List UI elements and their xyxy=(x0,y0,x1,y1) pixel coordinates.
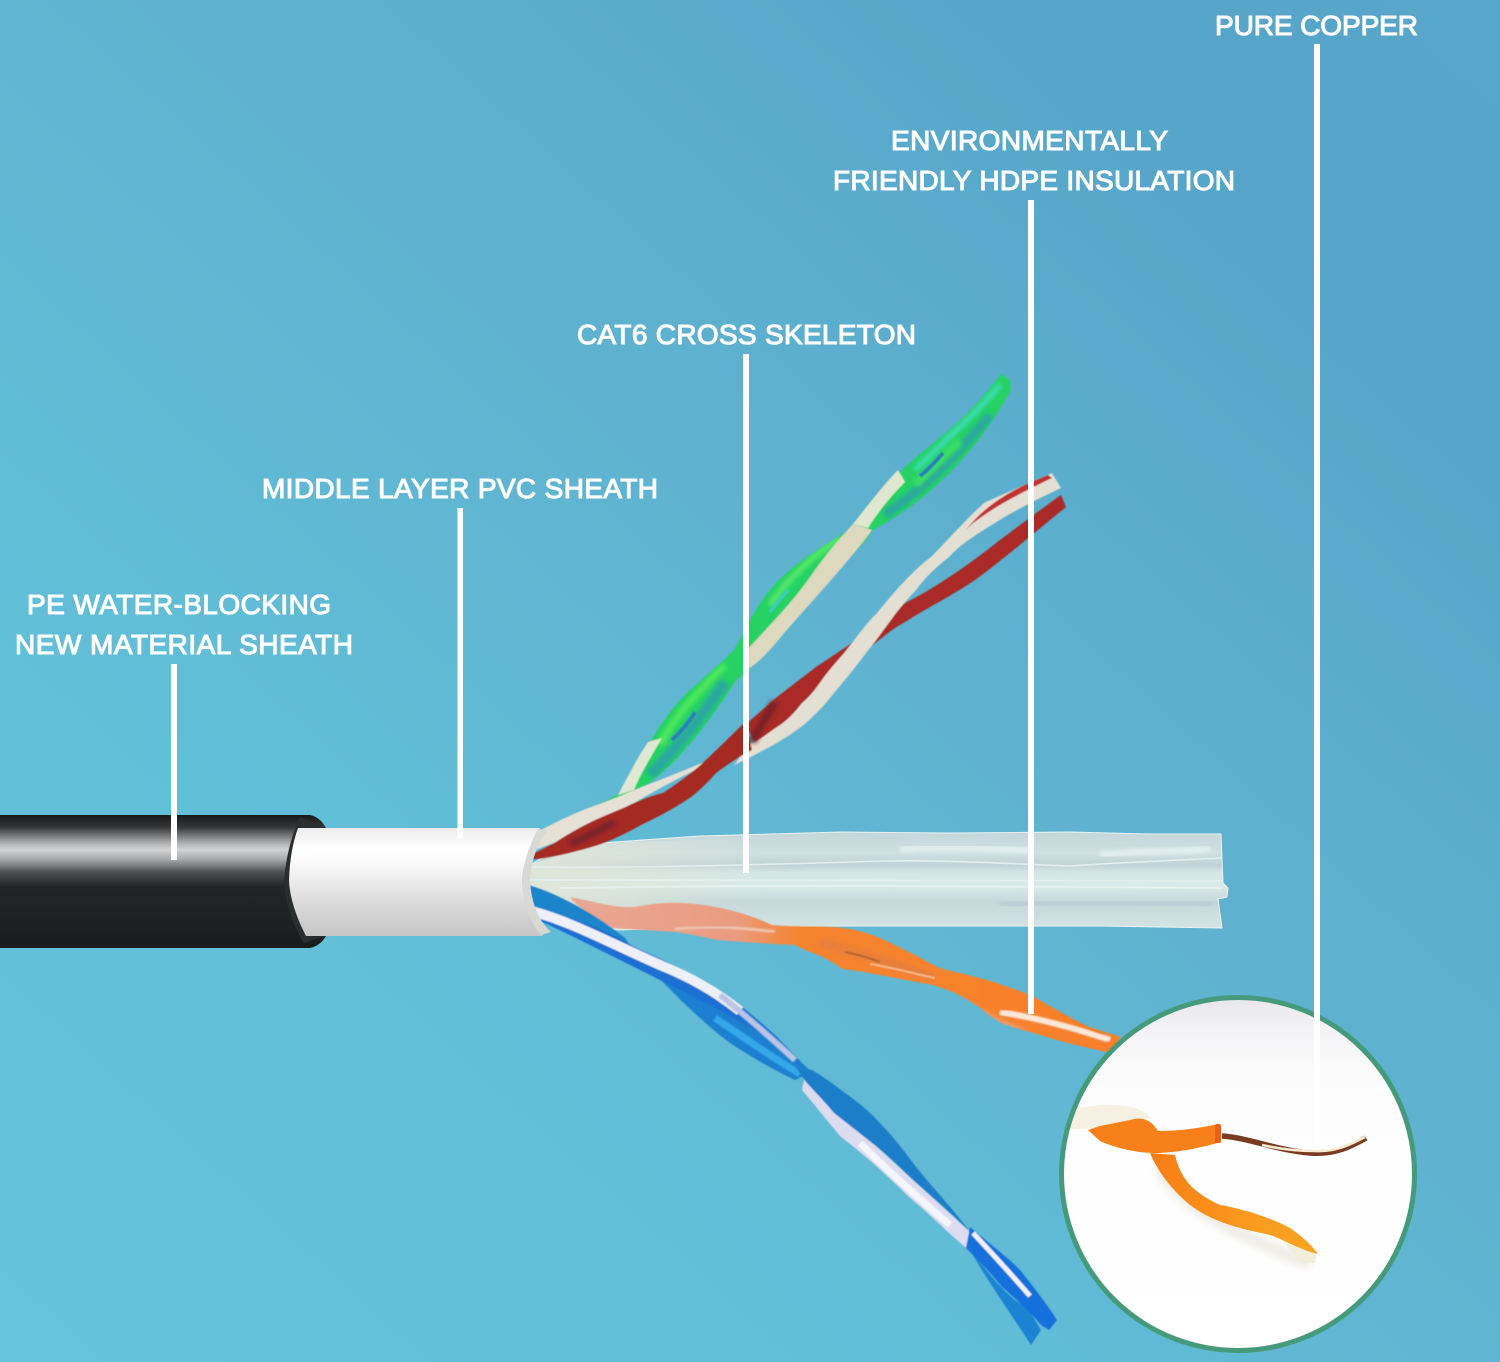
label: HDPE insulation: FRIENDLY HDPE INSULATION xyxy=(833,165,1235,196)
orange shading xyxy=(675,927,1110,1040)
label: pure copper: PURE COPPER xyxy=(1215,10,1418,41)
zoom lens: pure copper detail xyxy=(1060,998,1414,1350)
orange main strand xyxy=(1088,1119,1221,1153)
label: HDPE insulation xyxy=(833,125,1235,196)
light blue highlight xyxy=(715,1018,800,1074)
label: PE sheath xyxy=(15,589,353,660)
red strand dark shading xyxy=(752,702,775,742)
white strand lower xyxy=(802,1080,970,1248)
label: cross skeleton: CAT6 CROSS SKELETON xyxy=(577,319,916,350)
blue right tail xyxy=(966,1227,1057,1330)
white strand upper xyxy=(734,473,1061,765)
red crease xyxy=(570,822,615,844)
white stripe upper xyxy=(531,911,740,1011)
leader line: PVC sheath xyxy=(458,508,463,838)
soft wire shadow xyxy=(1160,1170,1310,1264)
green shading xyxy=(650,385,1000,775)
white PVC sheath xyxy=(289,828,551,936)
black outer PE sheath xyxy=(0,815,326,948)
leader line: copper xyxy=(1314,44,1320,1150)
cream tail tip xyxy=(1280,1238,1317,1263)
cross skeleton xyxy=(525,832,1228,930)
red strand lower xyxy=(527,722,752,860)
orange twisted pair xyxy=(570,897,1121,1053)
leader line: skeleton xyxy=(743,354,749,873)
orange silhouette xyxy=(570,897,1121,1053)
red twisted pair xyxy=(527,473,1066,860)
blue twisted pair xyxy=(524,884,1057,1345)
blue dark strand xyxy=(527,906,790,1052)
white strand lower xyxy=(527,763,706,853)
blue lower lobe xyxy=(634,947,812,1080)
blue top strand xyxy=(524,884,640,960)
label: PVC sheath: MIDDLE LAYER PVC SHEATH xyxy=(262,473,658,504)
label: PE sheath: PE WATER-BLOCKING xyxy=(27,589,331,620)
leader line: PE sheath xyxy=(171,664,177,860)
orange lower tail xyxy=(1150,1153,1318,1254)
label: PE sheath: NEW MATERIAL SHEATH xyxy=(15,629,353,660)
blue left tail xyxy=(966,1245,1041,1345)
white strand of green pair: lower xyxy=(618,738,662,795)
copper conductor xyxy=(1222,1136,1366,1153)
green twisted pair xyxy=(595,374,1011,810)
leader line: insulation xyxy=(1028,200,1034,1014)
white strand of green pair: upper xyxy=(853,470,905,528)
blue upper strand lower part xyxy=(795,1066,970,1232)
red strand upper xyxy=(745,495,1066,750)
label: HDPE insulation: ENVIRONMENTALLY xyxy=(891,125,1168,156)
green silhouette xyxy=(595,374,1011,810)
red stripe on white strand xyxy=(966,475,1052,530)
cream strand xyxy=(1070,1104,1152,1130)
white strand of green pair: middle xyxy=(745,524,872,669)
